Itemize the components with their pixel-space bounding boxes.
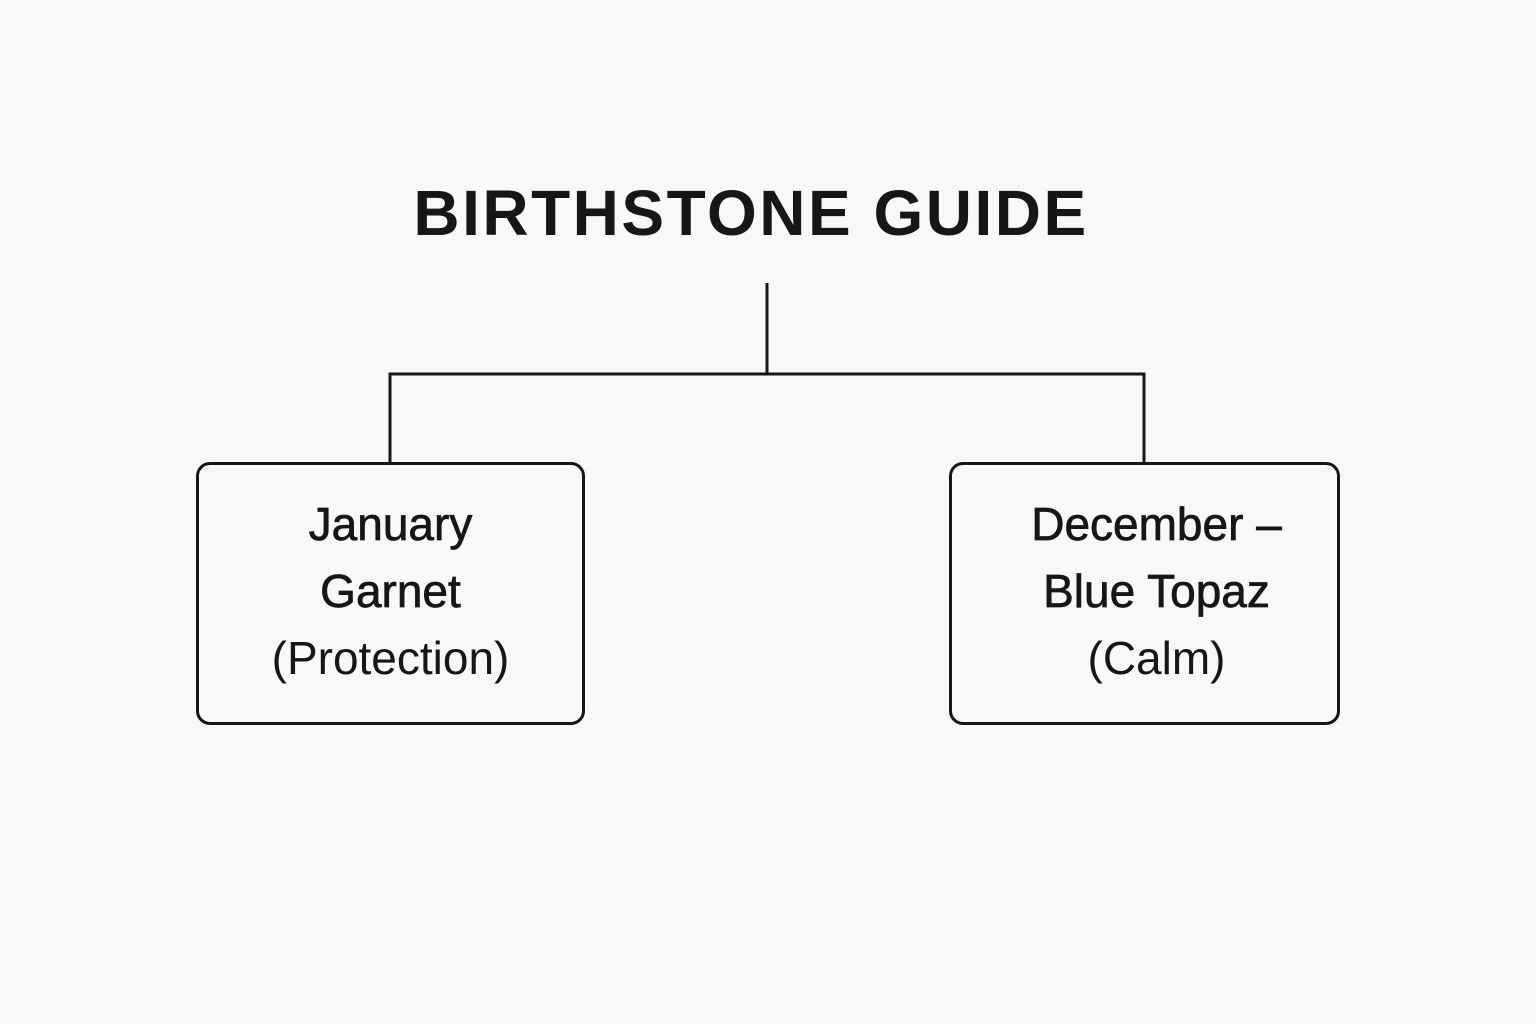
panel: December: Blue Topaz — [1043, 565, 1270, 617]
panel: December: December – — [1031, 498, 1282, 550]
panel: January — [196, 462, 585, 725]
title: BIRTHSTONE GUIDE — [413, 177, 1089, 249]
panel: December: (Calm) — [1088, 632, 1225, 684]
panel: December — [949, 462, 1340, 725]
panel: January: (Protection) — [272, 632, 509, 684]
panel: January: Garnet — [320, 565, 461, 617]
panel: January: January — [309, 498, 472, 550]
